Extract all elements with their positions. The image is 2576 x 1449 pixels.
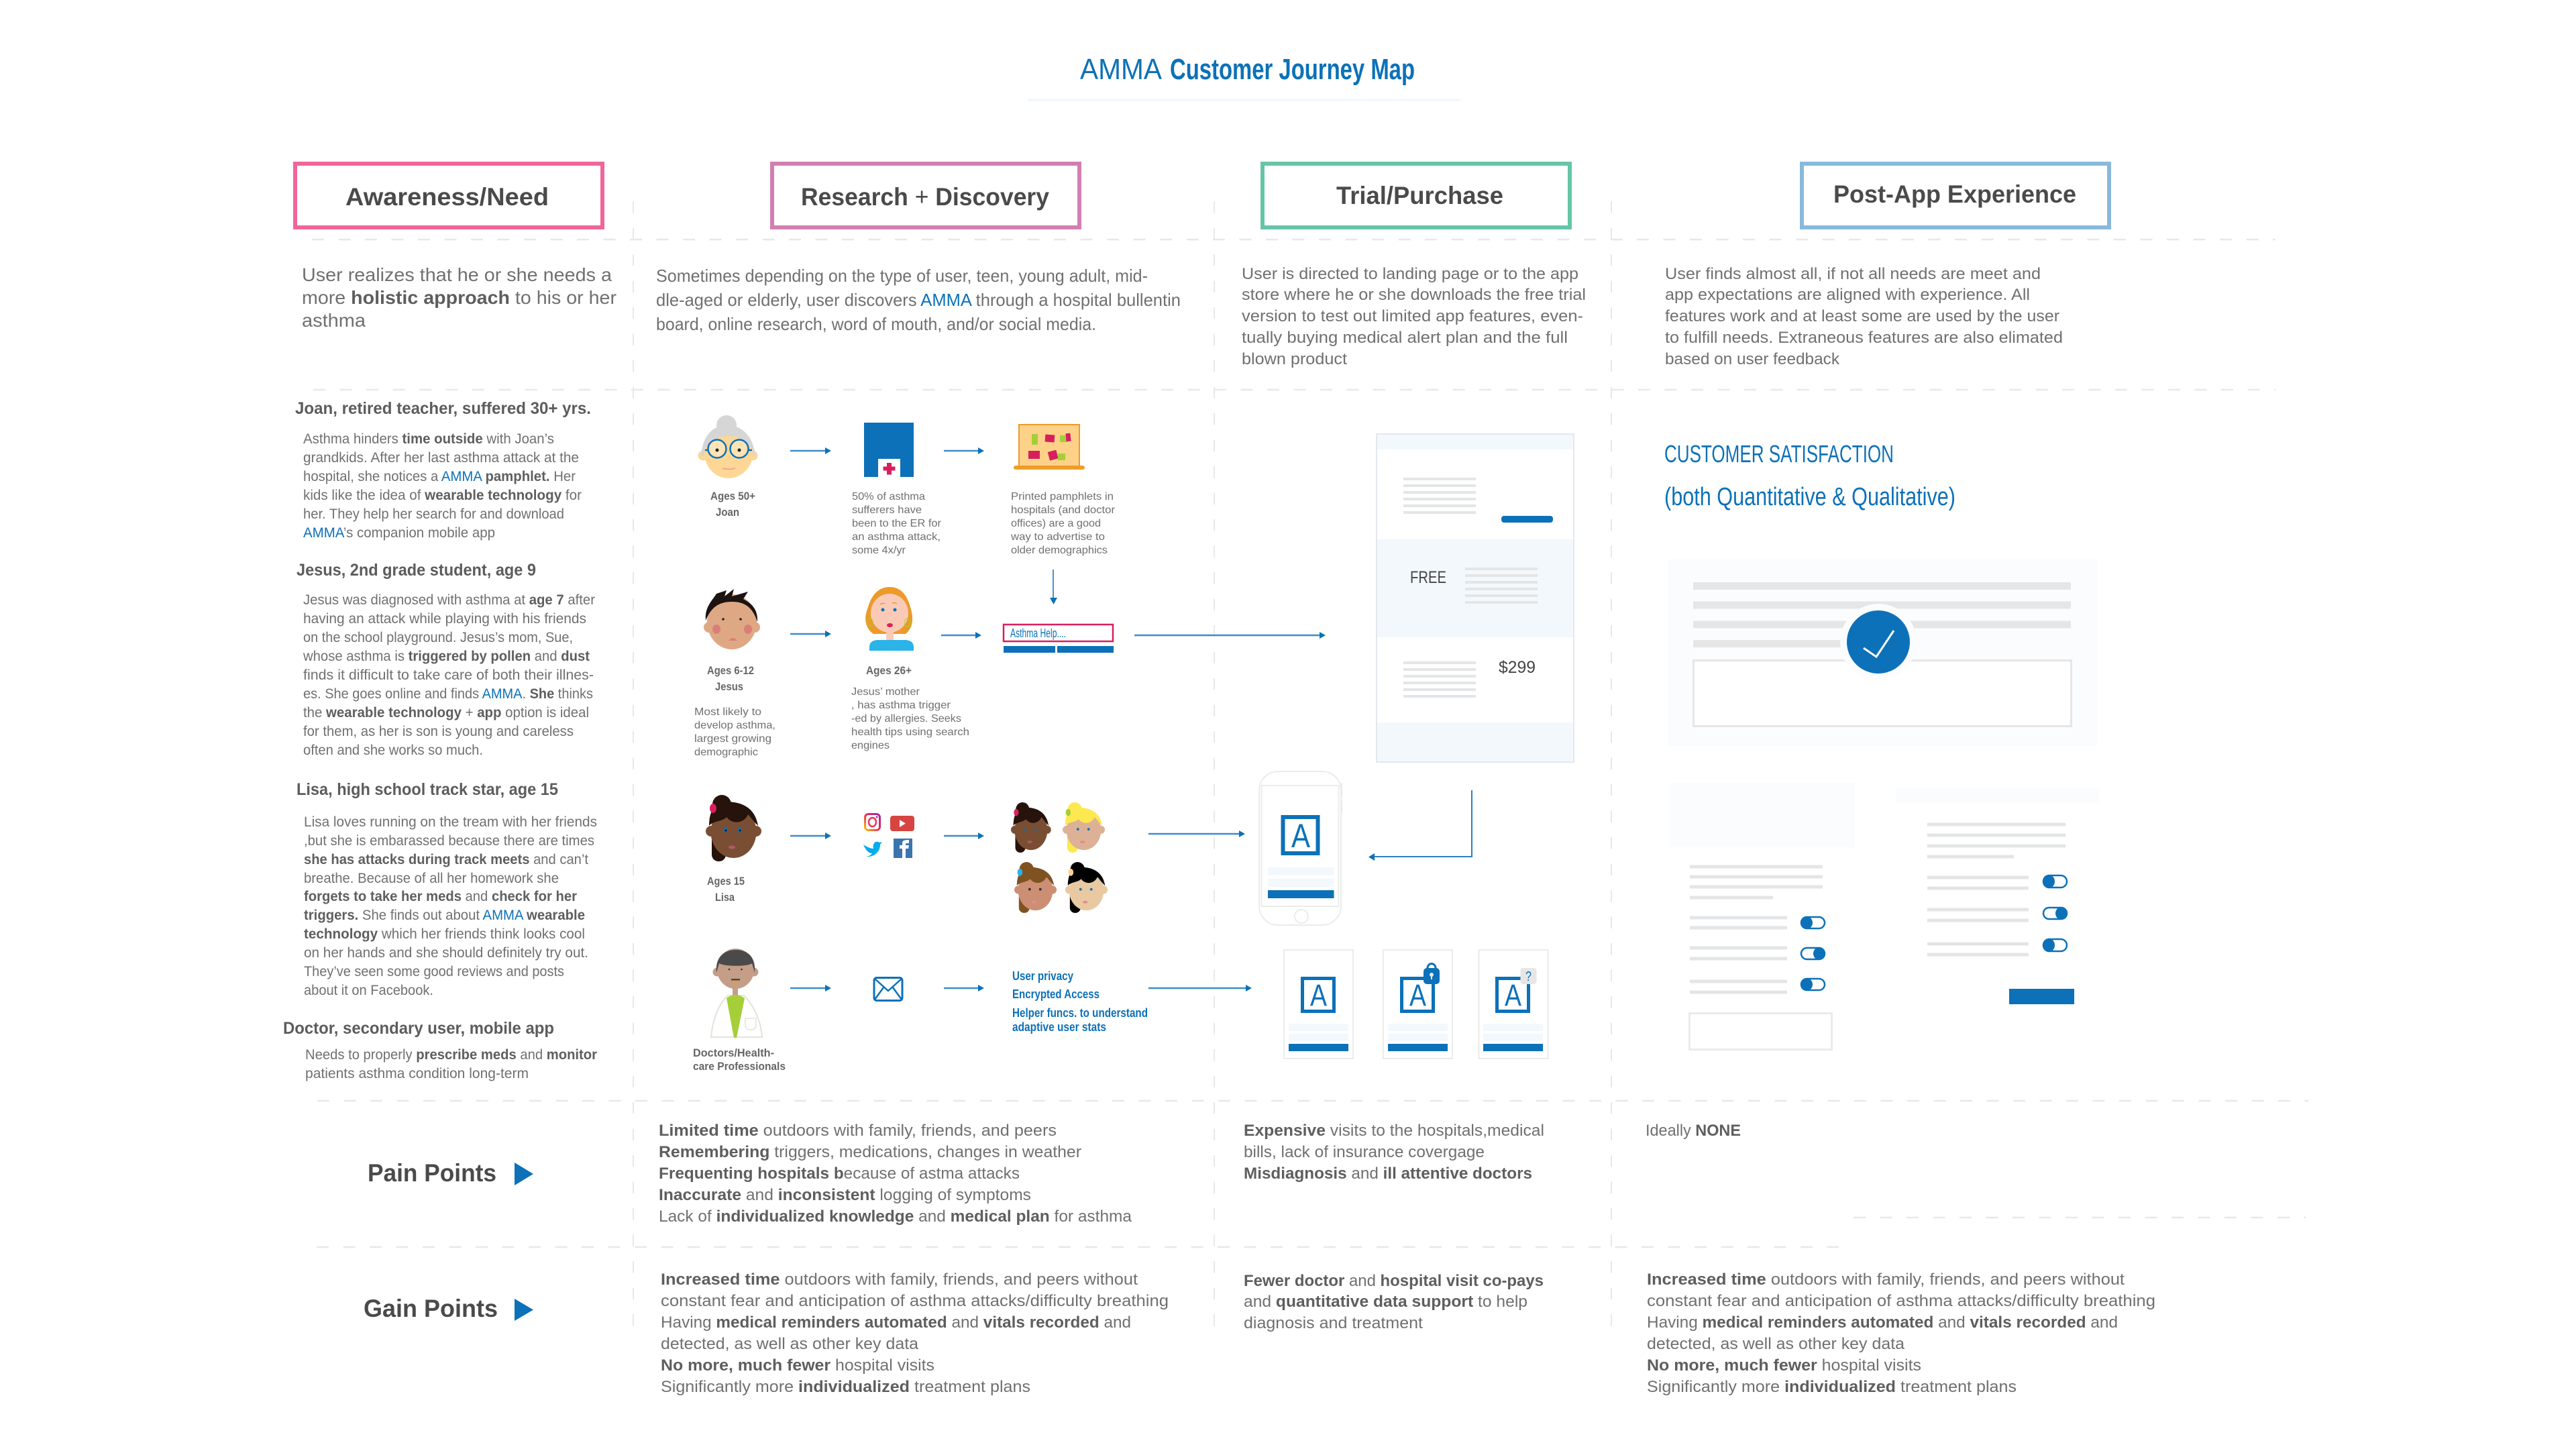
persona text: Doctor [283, 1019, 597, 1081]
text: Jesus demographic [694, 706, 775, 758]
description: trial: store where he or she downloads the free trial [1242, 286, 1586, 304]
icon: question: ? [1525, 969, 1532, 984]
description: trial: User is directed to landing page or to the app [1242, 265, 1578, 283]
persona text: Lisa: she has attacks during track meets and can’t [304, 852, 588, 867]
text: mother description [851, 686, 969, 751]
pain points: trial: Misdiagnosis and ill attentive doctors [1244, 1165, 1532, 1183]
description: research: Sometimes depending on the type of user, teen, young adult, mid- [656, 266, 1148, 286]
arrow: down to search [1050, 570, 1057, 604]
customer satisfaction heading: (both Quantitative & Qualitative) [1664, 483, 1955, 511]
persona text: Lisa: Lisa loves running on the tream with her friends [304, 814, 597, 830]
text: pamphlets: hospitals (and doctor [1011, 504, 1116, 516]
gain points: post-app: No more, much fewer hospital visits [1647, 1356, 1921, 1375]
pain points: research [659, 1122, 1132, 1226]
text: mother description: Jesus’ mother [851, 686, 920, 698]
stage header: Post-App Experience: Post-App Experience [1833, 180, 2076, 208]
title: AMMA [1080, 53, 1163, 86]
stage header: Awareness/Need: Awareness/Need [345, 183, 549, 211]
description: post-app [1665, 265, 2063, 368]
persona text: Joan: kids like the idea of wearable technology for [303, 488, 582, 503]
label: Lisa [707, 875, 745, 904]
gain points: trial: Fewer doctor and hospital visit co-pays [1244, 1272, 1544, 1290]
arrow [790, 631, 831, 637]
persona text: Joan [295, 399, 591, 541]
settings wireframe: left [1670, 783, 1855, 1049]
gain points: post-app: constant fear and anticipation of asthma attacks/difficulty breathing [1647, 1292, 2155, 1310]
description: post-app: User finds almost all, if not all needs are meet and [1665, 265, 2041, 283]
persona text: Lisa: technology which her friends think looks cool [304, 926, 585, 942]
search box: Asthma Help.... [1010, 627, 1066, 640]
customer satisfaction heading [1664, 440, 1955, 511]
arrow [944, 985, 984, 991]
persona text: Lisa: on her hands and she should definitely try out. [304, 945, 588, 961]
persona text: Joan: hospital, she notices a AMMA pamphlet. Her [303, 469, 576, 484]
text: doctor app features: Encrypted Access [1012, 987, 1099, 1001]
text: ER stat: 50% of asthma [852, 491, 925, 502]
app screen 2: privacy lock: A [1409, 978, 1426, 1012]
arrow: landing page back to phone [1368, 790, 1472, 861]
text: mother description: health tips using search [851, 727, 969, 738]
icon: mail [874, 978, 902, 1001]
gain points: research [661, 1271, 1169, 1396]
label: Joan: Ages 50+ [710, 490, 755, 502]
toggle [2043, 907, 2068, 920]
arrow: features to app screens [1148, 985, 1252, 991]
gain points: research: detected, as well as other key data [661, 1335, 919, 1353]
description: post-app: features work and at least some are used by the user [1665, 307, 2059, 325]
text: mother description: engines [851, 740, 890, 751]
gain points: post-app: Increased time outdoors with family, friends, and peers without [1647, 1271, 2125, 1289]
gain points: research: Increased time outdoors with family, friends, and peers without [661, 1271, 1138, 1289]
gain points: research: Having medical reminders automated and vitals recorded and [661, 1313, 1131, 1332]
persona text: Jesus: for them, as her is son is young and careless [303, 724, 574, 739]
text: doctor app features [1012, 969, 1148, 1034]
pain points: research: Limited time outdoors with family, friends, and peers [659, 1122, 1057, 1140]
persona text: Jesus: often and she works so much. [303, 743, 483, 758]
logo [1283, 817, 1318, 855]
description: post-app: based on user feedback [1665, 350, 1840, 368]
persona text: Lisa: about it on Facebook. [304, 983, 433, 998]
label: doctors: care Professionals [693, 1060, 786, 1073]
gain points: trial [1244, 1272, 1544, 1332]
stage header: Research + Discovery [772, 164, 1079, 227]
persona text: Lisa: Lisa, high school track star, age 15 [297, 780, 558, 799]
arrow [790, 833, 831, 839]
persona text: Jesus: whose asthma is triggered by pollen and dust [303, 649, 590, 664]
friend 2 [1063, 802, 1105, 853]
text: ER stat: sufferers have [852, 504, 922, 516]
persona text: Jesus: having an attack while playing with his friends [303, 611, 586, 627]
gain points: research: constant fear and anticipation of asthma attacks/difficulty breathing [661, 1292, 1169, 1310]
text: Jesus demographic: largest growing [694, 733, 771, 745]
gain points: trial: and quantitative data support to help [1244, 1293, 1527, 1311]
icon: lock [1424, 964, 1440, 984]
description: trial [1242, 265, 1586, 368]
app screen 3: help: A [1505, 978, 1521, 1012]
persona text: Joan: Joan, retired teacher, suffered 30+ yrs. [295, 399, 591, 418]
description: trial: blown product [1242, 350, 1347, 368]
friend 4 [1065, 862, 1108, 913]
price: free: FREE [1410, 568, 1446, 587]
persona text: Lisa [297, 780, 597, 998]
label: Jesus [707, 664, 754, 693]
app screen 1: A [1310, 978, 1327, 1012]
persona text: Lisa: triggers. She finds out about AMMA wearable [304, 908, 585, 923]
persona text: Lisa: breathe. Because of all her homework she [304, 871, 559, 886]
stage header: Research + Discovery: Research + Discovery [801, 183, 1049, 211]
stage header: Post-App Experience [1802, 164, 2109, 227]
persona text: Jesus: the wearable technology + app option is ideal [303, 705, 589, 720]
icon: question [1520, 968, 1536, 984]
label: doctors [693, 1046, 786, 1073]
pain points: trial: Expensive visits to the hospitals,medical [1244, 1122, 1544, 1140]
toggle [2043, 938, 2067, 952]
icon: pamphlet board [1014, 425, 1085, 470]
persona text: Jesus [297, 561, 595, 758]
text: Jesus demographic: develop asthma, [694, 720, 775, 731]
label: doctors: Doctors/Health- [693, 1046, 774, 1059]
arrow [790, 985, 831, 991]
icon: social media [863, 814, 914, 858]
dashed grid lines [633, 201, 1611, 1327]
text: Jesus demographic: demographic [694, 747, 758, 758]
description: awareness: asthma [302, 310, 366, 331]
text: ER stat [852, 491, 942, 556]
icon: doctor [711, 949, 762, 1038]
icon: check badge [1840, 604, 1917, 680]
description: research: dle-aged or elderly, user discovers AMMA through a hospital bullentin [656, 290, 1181, 310]
arrow: friends to phone [1148, 830, 1245, 837]
text: Jesus demographic: Most likely to [694, 706, 761, 718]
stage header: Trial/Purchase: Trial/Purchase [1336, 182, 1503, 209]
description: research: board, online research, word of mouth, and/or social media. [656, 314, 1096, 334]
persona text: Doctor: patients asthma condition long-term [305, 1066, 529, 1081]
label: Lisa: Ages 15 [707, 875, 745, 888]
title: Customer Journey Map [1170, 53, 1415, 86]
gain points: trial: diagnosis and treatment [1244, 1314, 1423, 1332]
label: Joan [710, 490, 755, 519]
text: ER stat: been to the ER for [852, 518, 942, 529]
text: mother description: , has asthma trigger [851, 700, 951, 711]
icon: mother [865, 587, 914, 651]
toggle [1801, 947, 1825, 960]
pain points: trial: bills, lack of insurance covergage [1244, 1143, 1485, 1161]
persona text: Jesus: Jesus was diagnosed with asthma at age 7 after [303, 592, 595, 608]
search box [1004, 625, 1114, 653]
pain points: post-app: Ideally NONE [1646, 1122, 1741, 1140]
text: ER stat: an asthma attack, [852, 531, 941, 543]
toggle [1801, 978, 1825, 991]
text: pamphlets: older demographics [1011, 545, 1108, 556]
icon: Lisa face [706, 795, 761, 861]
text: mother description: -ed by allergies. Seeks [851, 713, 961, 724]
description: post-app: app expectations are aligned with experience. All [1665, 286, 2030, 304]
description: post-app: to fulfill needs. Extraneous features are also elimated [1665, 329, 2063, 347]
icon: hospital [864, 423, 914, 477]
gain points: post-app [1647, 1271, 2155, 1396]
text: doctor app features: Helper funcs. to understand [1012, 1006, 1148, 1020]
label: Joan: Joan [716, 506, 739, 519]
text: pamphlets: offices) are a good [1011, 518, 1101, 529]
gain points: research: No more, much fewer hospital visits [661, 1356, 934, 1375]
pain points: research: Remembering triggers, medications, changes in weather [659, 1143, 1081, 1161]
persona text: Doctor: Doctor, secondary user, mobile app [283, 1019, 554, 1038]
persona text: Joan: AMMA’s companion mobile app [303, 525, 495, 541]
friend 1 [1011, 802, 1051, 853]
persona text: Jesus: es. She goes online and finds AMMA. She thinks [303, 686, 593, 702]
description: awareness [302, 264, 616, 331]
app screen 1 [1284, 950, 1353, 1059]
text: pamphlets: way to advertise to [1010, 531, 1105, 543]
persona text: Lisa: ,but she is embarassed because there are times [304, 833, 594, 849]
customer satisfaction heading: CUSTOMER SATISFACTION [1664, 440, 1894, 468]
row label: Gain Points: Gain Points [364, 1295, 498, 1322]
text: ER stat: some 4x/yr [852, 545, 906, 556]
gain points: post-app: Having medical reminders automated and vitals recorded and [1647, 1313, 2118, 1332]
friend 3 [1014, 862, 1057, 913]
stage header: Trial/Purchase [1263, 164, 1570, 227]
description: trial: tually buying medical alert plan and the full [1242, 329, 1568, 347]
persona text: Joan: Asthma hinders time outside with Joan’s [303, 431, 554, 447]
satisfaction form wireframe [1668, 559, 2098, 746]
text: doctor app features: User privacy [1012, 969, 1073, 983]
arrow [944, 447, 984, 454]
description: awareness: User realizes that he or she needs a [302, 264, 612, 285]
persona text: Doctor: Needs to properly prescribe meds and monitor [305, 1047, 597, 1063]
gain points: post-app: detected, as well as other key data [1647, 1335, 1905, 1353]
stage header: Awareness/Need [295, 164, 602, 227]
persona text: Joan: grandkids. After her last asthma attack at the [303, 450, 579, 466]
settings wireframe: right [1896, 788, 2099, 1004]
text: pamphlets [1010, 491, 1116, 556]
label: Jesus: Ages 6-12 [707, 664, 754, 677]
gain points: research: Significantly more individualized treatment plans [661, 1378, 1030, 1396]
icon: Jesus face [704, 589, 760, 649]
pain points: research: Lack of individualized knowledge and medical plan for asthma [659, 1208, 1132, 1226]
arrow [941, 632, 981, 639]
arrow [944, 833, 984, 839]
text: pamphlets: Printed pamphlets in [1011, 491, 1114, 502]
persona text: Lisa: They’ve seen some good reviews and posts [304, 964, 564, 979]
pain points: research: Frequenting hospitals because of astma attacks [659, 1165, 1020, 1183]
price: paid: $299 [1499, 658, 1536, 677]
persona text: Jesus: on the school playground. Jesus’s mom, Sue, [303, 630, 573, 645]
text: doctor app features: adaptive user stats [1012, 1020, 1106, 1034]
row label: Pain Points: Pain Points [368, 1159, 496, 1187]
description: awareness: more holistic approach to his or her [302, 287, 616, 308]
title [1028, 53, 1460, 101]
logo: A [1291, 817, 1311, 855]
phone mockup [1259, 771, 1342, 925]
arrow: search to landing page [1134, 632, 1326, 639]
toggle [2043, 875, 2067, 888]
persona text: Lisa: forgets to take her meds and check for her [304, 889, 577, 904]
icon: friends group [1011, 802, 1108, 913]
persona text: Jesus: finds it difficult to take care of both their illnes- [303, 667, 594, 683]
gain points: post-app: Significantly more individualized treatment plans [1647, 1378, 2017, 1396]
pain points: trial [1244, 1122, 1544, 1183]
pain points: research: Inaccurate and inconsistent logging of symptoms [659, 1186, 1031, 1204]
landing page wireframe [1377, 434, 1574, 762]
icon: Joan face [698, 415, 758, 478]
label: Jesus: Jesus [715, 680, 743, 693]
description: research [656, 266, 1181, 334]
arrow [790, 447, 831, 454]
label: mother: Ages 26+ [866, 664, 912, 677]
toggle [1801, 916, 1825, 929]
label: Lisa: Lisa [715, 891, 735, 904]
app screen 2: privacy lock [1383, 950, 1452, 1059]
app screen 3: help [1479, 950, 1548, 1059]
persona text: Joan: her. They help her search for and download [303, 506, 564, 522]
persona text: Jesus: Jesus, 2nd grade student, age 9 [297, 561, 536, 580]
description: trial: version to test out limited app features, even- [1242, 307, 1583, 325]
